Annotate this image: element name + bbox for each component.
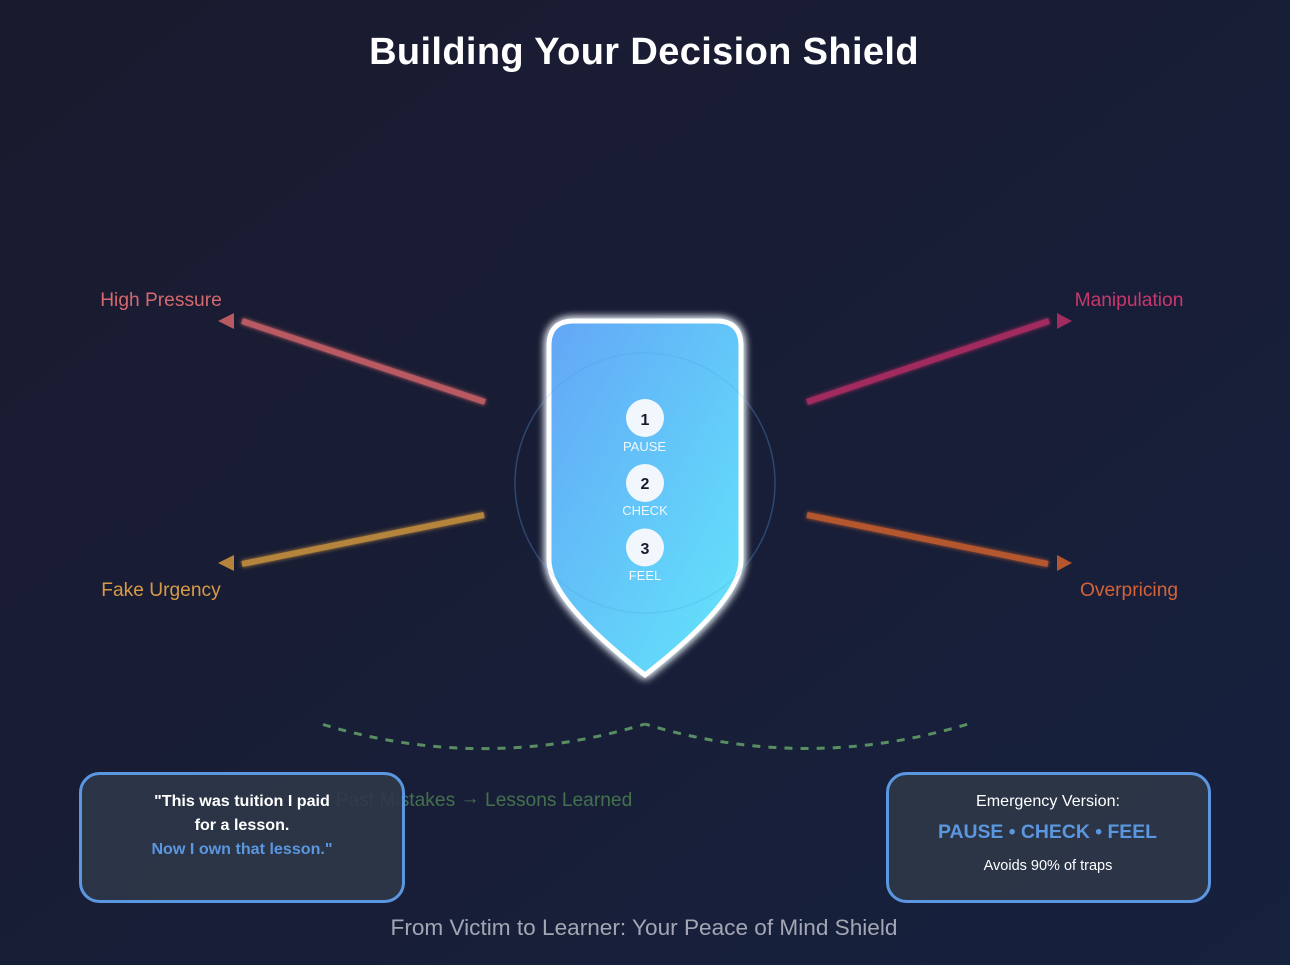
dashed foundation curve bbox=[323, 724, 968, 749]
step 2: check: CHECK bbox=[622, 503, 668, 518]
threat: fake urgency bbox=[101, 515, 484, 601]
step 2: check: 2 bbox=[641, 476, 650, 493]
title: Building Your Decision Shield bbox=[369, 31, 919, 73]
protective circle bbox=[515, 353, 775, 613]
panel: emergency version: Emergency Version: bbox=[976, 792, 1120, 810]
step 1: pause: PAUSE bbox=[623, 439, 666, 454]
panel: emergency version bbox=[888, 774, 1210, 902]
foundation label: Past Mistakes bbox=[336, 790, 455, 811]
panel: tuition quote: for a lesson. bbox=[195, 816, 289, 834]
step 3: feel: FEEL bbox=[629, 568, 661, 583]
threat: manipulation bbox=[807, 290, 1183, 402]
panel: tuition quote bbox=[80, 774, 404, 902]
threat: overpricing: Overpricing bbox=[1080, 580, 1178, 601]
threat: overpricing bbox=[807, 515, 1178, 601]
step 3: feel bbox=[626, 528, 664, 583]
step 3: feel: 3 bbox=[641, 541, 650, 558]
foundation label: Lessons Learned bbox=[485, 790, 632, 811]
panel: tuition quote: Now I own that lesson." bbox=[151, 840, 333, 858]
protective circle overlay bbox=[515, 353, 775, 613]
panel: tuition quote: "This was tuition I paid bbox=[154, 792, 330, 810]
footer tagline: From Victim to Learner: Your Peace of Mind Shield bbox=[391, 915, 897, 940]
step 1: pause bbox=[623, 399, 666, 454]
foundation label: → bbox=[461, 788, 480, 809]
step 2: check bbox=[622, 464, 668, 518]
step 1: pause: 1 bbox=[641, 412, 650, 429]
threat: manipulation: Manipulation bbox=[1075, 290, 1183, 311]
shield bbox=[515, 321, 775, 675]
threat: fake urgency: Fake Urgency bbox=[101, 580, 221, 601]
threat: high pressure bbox=[100, 290, 485, 402]
threat: high pressure: High Pressure bbox=[100, 290, 222, 311]
panel: emergency version: PAUSE • CHECK • FEEL bbox=[938, 821, 1157, 843]
panel: emergency version: Avoids 90% of traps bbox=[984, 858, 1112, 874]
